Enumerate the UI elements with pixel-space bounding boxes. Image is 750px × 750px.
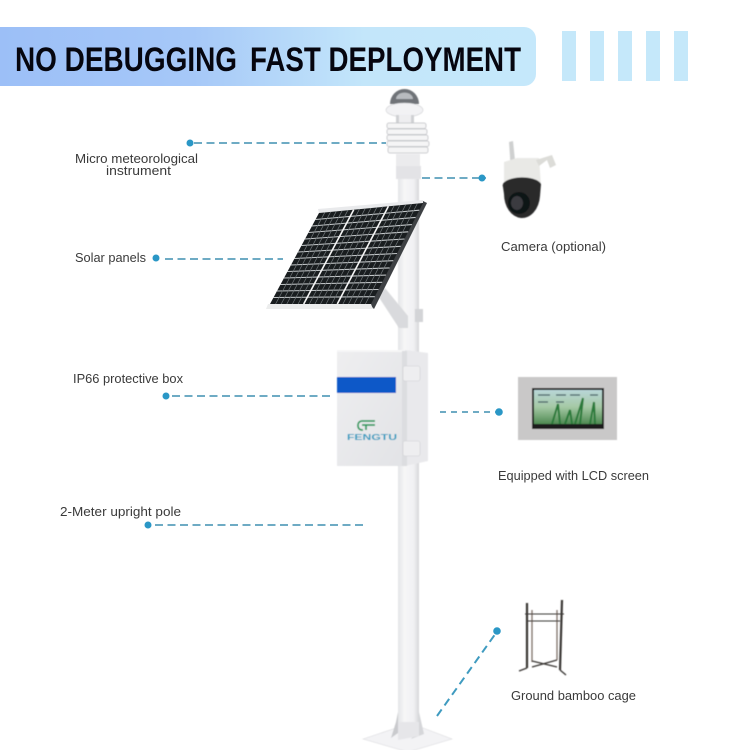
title banner: [0, 27, 536, 86]
callout: bamboo cage arrow: Ground bamboo cage: [511, 689, 636, 703]
callout: IP66 protective box: [73, 372, 332, 400]
solar panel: [266, 200, 427, 309]
blue band: [337, 377, 396, 393]
callout: micro meteorological instrument: [75, 140, 386, 178]
callout: camera: Camera (optional): [501, 240, 606, 254]
callout: solar panels: Solar panels: [75, 251, 146, 265]
callout: micro meteorological instrument: instrument: [106, 164, 172, 178]
box logo: FENGTU: [347, 433, 397, 442]
icon: ground bamboo cage: [519, 600, 566, 675]
callout: IP66 protective box: IP66 protective box: [73, 372, 184, 386]
title: [15, 41, 521, 79]
callout: upright pole: 2-Meter upright pole: [60, 505, 181, 519]
callout: bamboo cage arrow: [437, 627, 636, 716]
micro meteorological instrument: [386, 89, 429, 179]
icon: camera: [503, 141, 556, 218]
icon: LCD screen: [518, 377, 617, 440]
callout: camera: [422, 174, 606, 254]
callout: upright pole: [60, 505, 366, 528]
callout: LCD screen: [440, 408, 649, 483]
callout: solar panels: [75, 251, 283, 265]
callout: LCD screen: Equipped with LCD screen: [498, 469, 649, 483]
decorative stripes: [562, 31, 688, 81]
IP66 protective box: [337, 350, 428, 466]
title: NO DEBUGGING: [15, 41, 237, 79]
title: FAST DEPLOYMENT: [250, 41, 521, 79]
upright pole with base: [363, 178, 452, 750]
callout: micro meteorological instrument: Micro meteorological: [75, 152, 198, 166]
solar panel arm: [378, 288, 423, 328]
